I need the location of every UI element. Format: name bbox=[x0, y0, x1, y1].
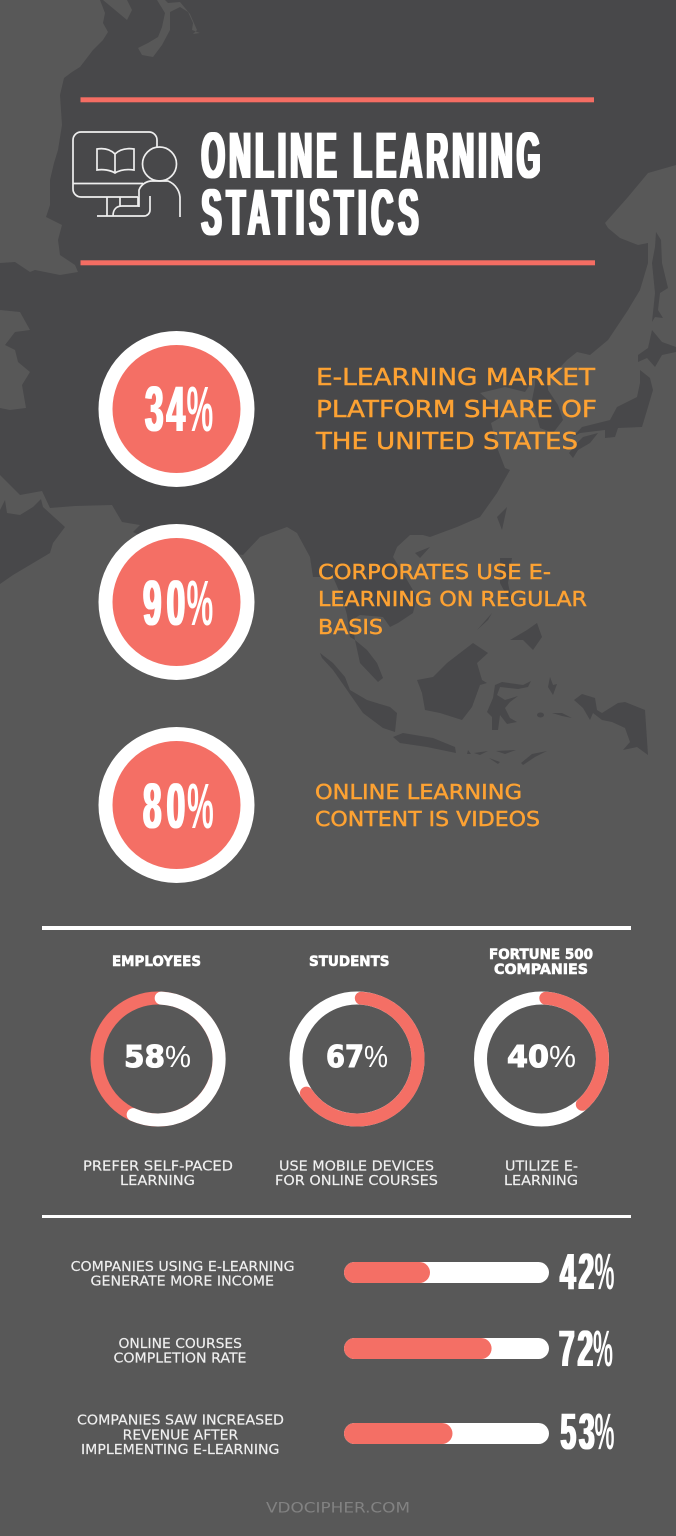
donut: students 67%: USE MOBILE DEVICES bbox=[279, 1158, 434, 1174]
bar: 53%: REVENUE AFTER bbox=[123, 1427, 238, 1443]
donut: fortune 500 40%: LEARNING bbox=[504, 1173, 578, 1189]
title block bbox=[73, 97, 595, 265]
donut: employees 58%: LEARNING bbox=[120, 1173, 195, 1189]
footer: VDOCIPHER.COM bbox=[266, 1500, 410, 1516]
bar: 53%: 53 bbox=[560, 1403, 595, 1460]
donut: employees 58% bbox=[83, 954, 233, 1189]
bar: 42%: COMPANIES USING E-LEARNING bbox=[71, 1259, 295, 1275]
donut: fortune 500 40%: UTILIZE E- bbox=[505, 1158, 578, 1174]
bar: 72% bbox=[114, 1320, 613, 1378]
heading: ONLINE LEARNING bbox=[201, 119, 540, 192]
stat: 34%: PLATFORM SHARE OF bbox=[316, 397, 597, 423]
donut: fortune 500 40%: 40 bbox=[507, 1040, 549, 1075]
icon: teacher with monitor and book bbox=[73, 132, 180, 217]
stat: 34%: E-LEARNING MARKET bbox=[316, 365, 596, 391]
donut: students 67%: STUDENTS bbox=[309, 954, 390, 970]
bar: 72%: COMPLETION RATE bbox=[114, 1350, 246, 1366]
stat: 90% bbox=[106, 531, 587, 673]
bar: 53%: % bbox=[594, 1404, 614, 1461]
bar: 42%: 42 bbox=[560, 1243, 594, 1300]
donut: fortune 500 40% bbox=[480, 947, 602, 1189]
donut: fortune 500 40%: COMPANIES bbox=[494, 962, 588, 978]
stat: 80%: % bbox=[187, 770, 214, 842]
heading: STATISTICS bbox=[201, 176, 419, 249]
stat: 80% bbox=[106, 734, 540, 876]
stat: 90%: BASIS bbox=[318, 615, 383, 639]
donut: students 67%: % bbox=[364, 1039, 388, 1074]
bar: 53%: COMPANIES SAW INCREASED bbox=[77, 1413, 284, 1429]
stat: 34%: 34 bbox=[145, 373, 185, 445]
donut: students 67%: 67 bbox=[326, 1040, 364, 1075]
top rule bbox=[80, 97, 594, 102]
bar: 42%: % bbox=[594, 1244, 614, 1301]
bar: 42% bbox=[71, 1243, 614, 1301]
bar: 53% bbox=[77, 1403, 614, 1461]
stat: 90%: LEARNING ON REGULAR bbox=[318, 587, 587, 611]
bar: 53%: IMPLEMENTING E-LEARNING bbox=[81, 1442, 280, 1458]
donut: employees 58%: EMPLOYEES bbox=[112, 954, 201, 970]
donut: students 67% bbox=[275, 954, 438, 1189]
bar: 72%: 72 bbox=[559, 1320, 593, 1377]
bottom rule bbox=[80, 260, 595, 265]
stat: 80%: 80 bbox=[143, 770, 185, 842]
donut: fortune 500 40%: % bbox=[549, 1039, 576, 1074]
heading bbox=[201, 119, 540, 249]
donut: fortune 500 40%: FORTUNE 500 bbox=[489, 947, 593, 963]
donut: employees 58%: % bbox=[165, 1039, 191, 1074]
stat: 90%: 90 bbox=[143, 567, 185, 639]
donut: employees 58%: 58 bbox=[124, 1040, 165, 1075]
bar: 42%: GENERATE MORE INCOME bbox=[90, 1274, 274, 1290]
donut: employees 58%: PREFER SELF-PACED bbox=[83, 1158, 233, 1174]
stat: 34% bbox=[106, 338, 597, 480]
stat: 90%: % bbox=[186, 567, 213, 639]
donut: students 67%: FOR ONLINE COURSES bbox=[275, 1173, 438, 1189]
stat: 80%: CONTENT IS VIDEOS bbox=[315, 807, 540, 831]
bar: 72%: % bbox=[593, 1321, 613, 1378]
bar: 72%: ONLINE COURSES bbox=[118, 1336, 242, 1352]
stat: 34%: % bbox=[186, 373, 213, 445]
stat: 80%: ONLINE LEARNING bbox=[315, 780, 522, 804]
stat: 90%: CORPORATES USE E- bbox=[318, 560, 551, 584]
stat: 34%: THE UNITED STATES bbox=[315, 429, 578, 455]
